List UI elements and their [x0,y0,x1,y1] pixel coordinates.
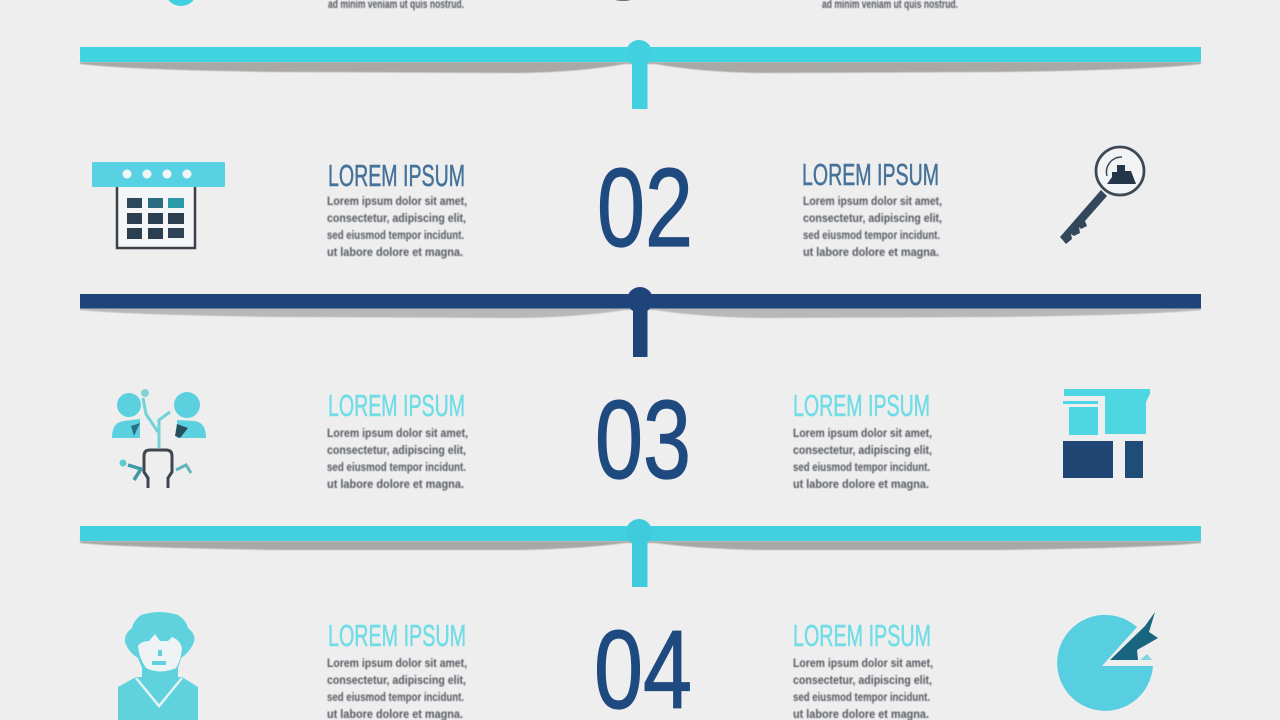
heading: right: LOREM IPSUM [793,618,931,653]
text block: right: Lorem ipsum dolor sit amet, [793,658,933,670]
text block: left: consectetur, adipiscing elit, [327,445,466,457]
icon: blocks [1063,389,1150,478]
text block: left: Lorem ipsum dolor sit amet, [327,196,467,208]
number 03: 03 [595,378,691,502]
top row: clipped row 01 [167,0,958,11]
text block: left [327,428,468,491]
icon: key with magnifier [1060,147,1144,244]
text block: right: consectetur, adipiscing elit, [793,445,932,457]
heading: left: LOREM IPSUM [328,158,465,193]
divider 2: navy bar with connector [80,287,1201,357]
heading: left: LOREM IPSUM [328,388,465,423]
text block: right: sed eiusmod tempor incidunt. [803,230,940,242]
text block: right [803,196,942,259]
text block: left: Lorem ipsum dolor sit amet, [327,658,467,670]
text block: left: sed eiusmod tempor incidunt. [327,230,464,242]
heading: right: LOREM IPSUM [802,157,939,192]
text block: left: sed eiusmod tempor incidunt. [327,692,464,704]
text block: left: sed eiusmod tempor incidunt. [327,462,466,474]
text block: left: consectetur, adipiscing elit, [327,213,466,225]
text block: left [327,658,467,720]
icon: person [118,612,198,720]
text block: right [793,658,933,720]
text block: left: ut labore dolore et magna. [327,247,463,259]
text block: right: Lorem ipsum dolor sit amet, [793,428,932,440]
heading: right: LOREM IPSUM [793,388,930,423]
text block: right: Lorem ipsum dolor sit amet, [803,196,942,208]
text block: left: consectetur, adipiscing elit, [327,675,466,687]
text block: right: sed eiusmod tempor incidunt. [793,462,930,474]
icon: calendar [92,162,225,248]
text block: left [327,196,467,259]
text block: right [793,428,932,491]
icon: plant with figures [112,389,206,488]
text block: right: consectetur, adipiscing elit, [793,675,932,687]
text block: right: ut labore dolore et magna. [793,479,929,491]
text block: right: consectetur, adipiscing elit, [803,213,942,225]
row 03 [112,378,1150,502]
text block: right: sed eiusmod tempor incidunt. [793,692,930,704]
divider 1: teal bar with connector [80,40,1201,109]
text block: right: ut labore dolore et magna. [803,247,939,259]
heading: left: LOREM IPSUM [328,618,466,653]
row 04 [118,608,1158,720]
text block: left: Lorem ipsum dolor sit amet, [327,428,468,440]
icon: pie chart with slice [1057,612,1158,711]
row 02 [92,146,1144,270]
text block: left: ut labore dolore et magna. [327,479,464,491]
divider 3: teal bar with connector [80,519,1201,587]
icon: clipped circle [167,0,195,6]
icon: clipped centre number [611,0,635,1]
number 02: 02 [597,146,693,270]
